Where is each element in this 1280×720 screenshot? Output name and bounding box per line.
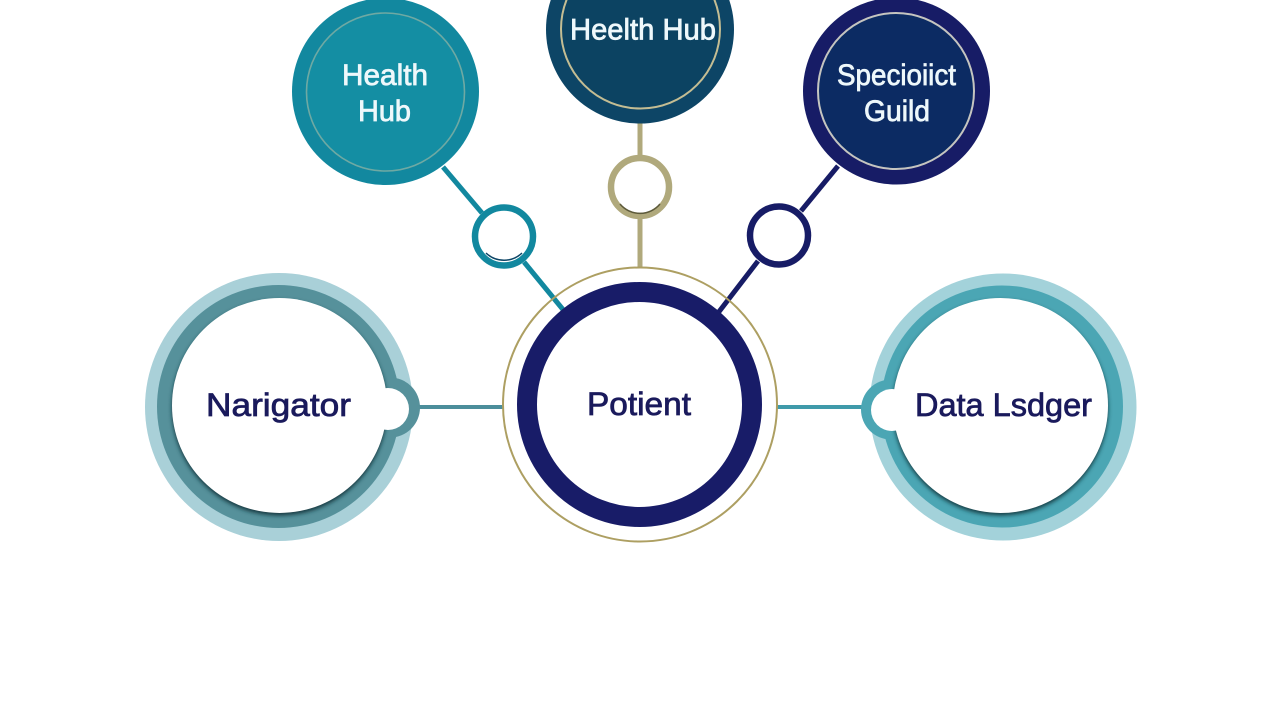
node: Health Hub teal bbox=[292, 0, 479, 185]
connector: teal spoke bbox=[443, 167, 565, 312]
node: Patient bbox=[503, 268, 777, 542]
node: Health Hub dark bbox=[546, 0, 734, 124]
junction: navy bbox=[750, 206, 808, 264]
label: Health Hub: Health bbox=[342, 59, 428, 92]
connector: gold spoke bbox=[638, 122, 642, 268]
label: Specioiict Guild bbox=[837, 59, 957, 128]
junction: teal bbox=[475, 208, 533, 266]
label: Specioiict Guild: Guild bbox=[864, 95, 930, 128]
label: Specioiict Guild: Specioiict bbox=[837, 59, 957, 92]
label: Health Hub: Hub bbox=[358, 95, 411, 128]
connector: navigator to patient bbox=[417, 405, 503, 409]
label: Data Lsdger: Data Lsdger bbox=[915, 387, 1092, 423]
label: Heelth Hub: Heelth Hub bbox=[570, 14, 716, 46]
junction: gold bbox=[611, 158, 669, 216]
label: Narigator: Narigator bbox=[206, 387, 351, 423]
connector: patient to data ledger bbox=[777, 405, 864, 409]
label: Health Hub bbox=[342, 59, 428, 128]
node: Navigator bbox=[145, 273, 420, 541]
node: Data Ledger bbox=[861, 274, 1136, 540]
node: Specialist Guild bbox=[803, 0, 990, 184]
label: Potient: Potient bbox=[587, 386, 691, 422]
connector: navy spoke bbox=[718, 166, 838, 313]
